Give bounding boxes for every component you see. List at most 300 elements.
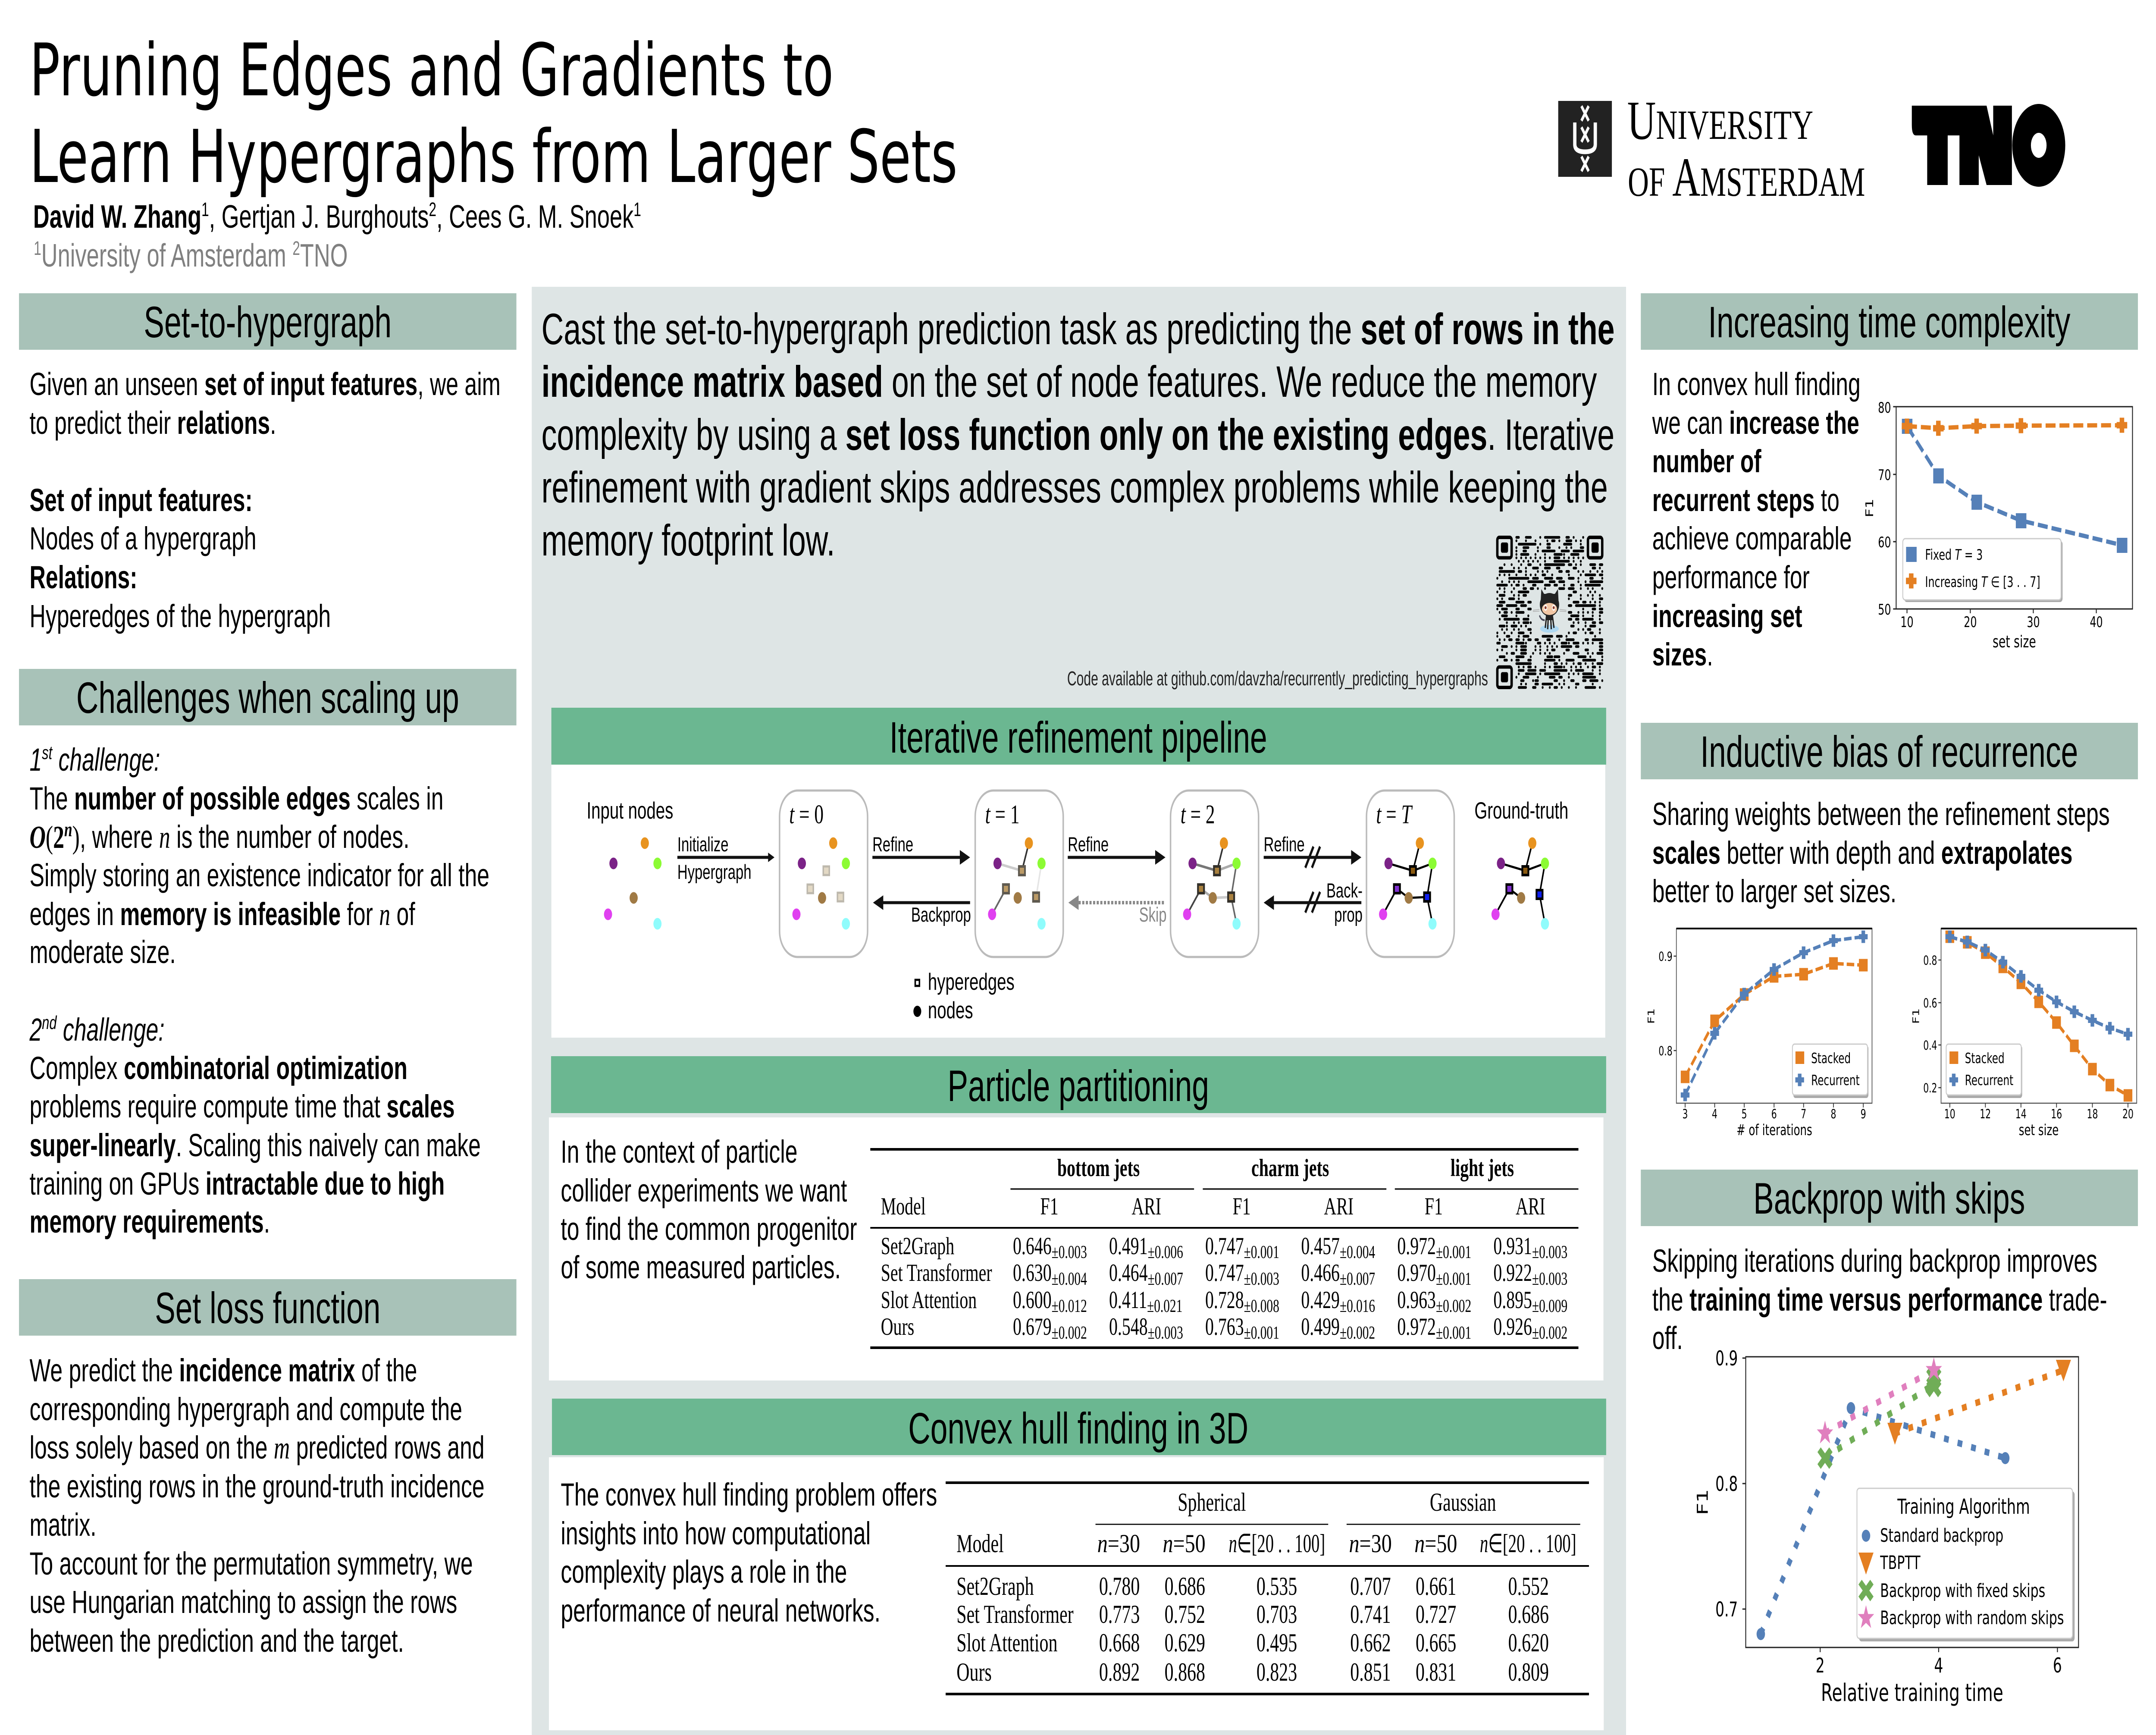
text: increasing time complexity (1652, 366, 1861, 672)
text: set loss function: loss solely based on the m predicted rows and (30, 1430, 485, 1465)
table: convex hull results: 0.707 (1350, 1572, 1391, 1601)
line chart: F1 vs set size, stacked vs recurrent: 12 (1980, 1107, 1991, 1121)
table: convex hull results: 0.629 (1165, 1629, 1205, 1657)
scatter line chart: F1 vs relative training time: Relative training time (1821, 1679, 2003, 1707)
legend: iterations chart: Stacked (1811, 1050, 1851, 1067)
text: challenges: ) (72, 819, 80, 855)
text: set-to-hypergraph intro: Nodes of a hypergraph (30, 521, 257, 556)
table: particle partitioning results: 0.926 (1493, 1313, 1532, 1340)
line chart: F1 vs number of iterations: 5 (1742, 1107, 1747, 1121)
text: central summary: complexity by using a set loss function only on the existing edges. Iterative (542, 410, 1614, 459)
line chart: F1 vs set size, stacked vs recurrent: F1 (1911, 1008, 1921, 1024)
text: challenges: st (42, 743, 53, 763)
line chart: F1 vs number of iterations: 0.9 (1658, 949, 1673, 964)
line chart: F1 vs set size, fixed vs increasing T: F1 (1864, 499, 1876, 518)
table: particle partitioning results: 0.747 (1205, 1259, 1244, 1286)
table: particle partitioning results: 0.600 (1013, 1286, 1052, 1314)
table: convex hull results: 0.809 (1508, 1658, 1549, 1687)
line chart: F1 vs set size, stacked vs recurrent: 18 (2087, 1107, 2098, 1121)
table: particle partitioning results: 0.931 (1493, 1232, 1532, 1260)
table: convex hull results: 0.773 (1099, 1600, 1140, 1629)
table: particle partitioning results: ±0.003 (1148, 1323, 1183, 1343)
affiliations: 2 (292, 238, 300, 259)
arrow: skipped backprop: Skip (1139, 903, 1167, 926)
text: particle partitioning: to find the common progenitor (561, 1211, 857, 1247)
table: convex hull results: Model (956, 1530, 1004, 1558)
text: increasing time complexity: achieve comparable (1652, 521, 1852, 556)
table: convex hull results: 0.661 (1416, 1572, 1456, 1601)
panel: set loss function (19, 1279, 517, 1659)
heading: set loss function: Set loss function (155, 1283, 380, 1333)
arrow: refine t1 to t2: Refine (1068, 833, 1109, 856)
logo: University of Amsterdam: OF AMSTERDAM (1628, 147, 1865, 208)
text: challenges: problems require compute time that scales (30, 1089, 455, 1124)
table: convex hull results: 0.892 (1099, 1658, 1140, 1687)
text: central summary: refinement with gradient skips addresses complex problems while keeping the (542, 462, 1608, 512)
table: particle partitioning results: 0.747 (1205, 1232, 1244, 1260)
text: challenges: Simply storing an existence indicator for all the (30, 857, 489, 893)
table: particle partitioning results: ±0.002 (1340, 1323, 1375, 1343)
line chart: F1 vs number of iterations: 0.8 (1658, 1044, 1673, 1058)
text: set loss function: the existing rows in the ground-truth incidence (30, 1468, 485, 1504)
text: challenges: challenge: (52, 742, 160, 778)
text: challenges: challenge: (56, 1012, 165, 1048)
text: convex hull finding: performance of neural networks. (561, 1593, 881, 1628)
line chart: F1 vs set size, stacked vs recurrent: 0.6 (1923, 996, 1937, 1010)
text: set-to-hypergraph intro (30, 366, 501, 634)
table: particle partitioning results: ±0.009 (1532, 1296, 1567, 1316)
table: particle partitioning results: ARI (1131, 1192, 1161, 1220)
legend: training algorithm: Backprop with fixed skips (1880, 1580, 2045, 1601)
line chart: F1 vs set size, stacked vs recurrent: 16 (2051, 1107, 2062, 1121)
heading: challenges: Challenges when scaling up (76, 673, 459, 722)
table: convex hull results: Ours (956, 1658, 992, 1687)
table: particle partitioning results: ±0.003 (1532, 1269, 1567, 1289)
table: convex hull results: 0.823 (1257, 1658, 1297, 1687)
text: challenges: Complex combinatorial optimization (30, 1050, 407, 1086)
table: particle partitioning results: 0.499 (1301, 1313, 1340, 1340)
table: particle partitioning results: Slot Attention (881, 1286, 977, 1314)
text: set loss function: We predict the incidence matrix of the (30, 1352, 417, 1388)
line chart: F1 vs set size, fixed vs increasing T: set size (1993, 632, 2036, 651)
legend: time complexity chart: Fixed T = 3 (1925, 546, 1983, 563)
line chart: F1 vs number of iterations: 7 (1801, 1107, 1806, 1121)
table: convex hull results: n=30 (1349, 1530, 1392, 1558)
text: challenges: nd (42, 1013, 57, 1033)
panel: increasing time complexity (1641, 293, 2138, 672)
arrow: initialize hypergraph: Hypergraph (677, 860, 752, 883)
table: particle partitioning results: ±0.001 (1436, 1269, 1471, 1289)
line chart: F1 vs set size, stacked vs recurrent: 20 (2122, 1107, 2134, 1121)
heading: backprop with skips: Backprop with skips (1753, 1173, 2025, 1223)
legend: hyperedges and nodes: nodes (928, 997, 973, 1024)
text: set loss function (30, 1352, 485, 1659)
text: set loss function: corresponding hypergraph and compute the (30, 1391, 462, 1427)
arrow: refine with gradient cut (1264, 833, 1361, 868)
legend: iterations chart (1792, 1044, 1868, 1098)
authors: 2 (429, 199, 436, 220)
table: particle partitioning results: 0.970 (1397, 1259, 1436, 1286)
panel: inductive bias of recurrence (1641, 723, 2138, 1139)
heading: set loss function (19, 1279, 517, 1336)
heading: inductive bias of recurrence (1641, 723, 2138, 779)
legend: training algorithm: Standard backprop (1880, 1525, 2003, 1546)
table: particle partitioning results: 0.728 (1205, 1286, 1244, 1314)
table: convex hull results: 0.831 (1416, 1658, 1456, 1687)
line chart: F1 vs number of iterations: # of iterations (1736, 1122, 1812, 1139)
arrow: backprop t1 to t0 (873, 895, 971, 926)
authors: 1 (201, 199, 209, 220)
line chart: F1 vs number of iterations (1646, 929, 1872, 1139)
legend: time complexity chart (1903, 539, 2062, 602)
table: convex hull results: 0.668 (1099, 1629, 1140, 1657)
text: convex hull finding: insights into how computational (561, 1515, 871, 1551)
table: particle partitioning results: 0.972 (1397, 1313, 1436, 1340)
diagram: state t=T: t = T (1376, 799, 1413, 829)
scatter line chart: F1 vs relative training time: 4 (1934, 1653, 1943, 1678)
line chart: F1 vs set size, fixed vs increasing T: 20 (1964, 614, 1977, 631)
heading: inductive bias of recurrence: Inductive bias of recurrence (1700, 727, 2078, 776)
text: challenges: 2 (30, 1012, 42, 1048)
scatter line chart: F1 vs relative training time: 2 (1816, 1653, 1825, 1678)
text: increasing time complexity: performance for (1652, 559, 1810, 595)
text: challenges: O(2 (30, 819, 64, 855)
scatter line chart: F1 vs relative training time: F1 (1694, 1489, 1711, 1515)
text: backprop with skips (1652, 1243, 2107, 1356)
table: particle partitioning results: ±0.003 (1244, 1269, 1279, 1289)
table: convex hull results: Slot Attention (956, 1629, 1058, 1657)
table: particle partitioning results: ARI (1324, 1192, 1354, 1220)
panel: challenges when scaling up (19, 669, 517, 1239)
text: backprop with skips: the training time versus performance trade- (1652, 1282, 2107, 1318)
logo: University of Amsterdam: UNIVERSITY (1627, 90, 1813, 151)
text: challenges: 1 (30, 742, 42, 778)
arrow: backprop with gradient cut: Back- (1326, 879, 1363, 902)
authors: David W. Zhang (33, 198, 201, 235)
text: increasing time complexity: we can increase the (1652, 405, 1859, 441)
table: convex hull results: 0.703 (1257, 1600, 1297, 1629)
table: convex hull results: Gaussian (1430, 1488, 1496, 1517)
text: particle partitioning (561, 1134, 857, 1285)
arrow: refine t0 to t1: Refine (872, 833, 913, 856)
table: convex hull results: 0.686 (1165, 1572, 1205, 1601)
line chart: F1 vs set size, fixed vs increasing T: 10 (1900, 614, 1914, 631)
table: particle partitioning results: light jets (1451, 1154, 1514, 1182)
table: convex hull results: 0.851 (1350, 1658, 1391, 1687)
heading: iterative refinement pipeline (552, 708, 1606, 765)
text: challenges: The number of possible edges scales in (30, 781, 443, 816)
affiliations: 1 (34, 238, 41, 259)
table: convex hull results: 0.741 (1350, 1600, 1391, 1629)
affiliations: University of Amsterdam (41, 237, 292, 273)
line chart: F1 vs set size, stacked vs recurrent: set size (2019, 1122, 2059, 1139)
text: set-to-hypergraph intro: Set of input features: (30, 482, 253, 518)
table: convex hull results: n=30 (1097, 1530, 1140, 1558)
text: backprop with skips: Skipping iterations during backprop improves (1652, 1243, 2097, 1279)
table: particle partitioning results: ±0.016 (1340, 1296, 1375, 1316)
text: particle partitioning: of some measured particles. (561, 1249, 841, 1285)
scatter line chart: F1 vs relative training time: 0.8 (1715, 1472, 1738, 1496)
legend: set size chart: Stacked (1965, 1050, 2005, 1067)
table: convex hull results: n=50 (1414, 1530, 1457, 1558)
poster title (30, 28, 958, 200)
text: challenges: n (64, 818, 72, 841)
table: convex hull results: 0.495 (1257, 1629, 1297, 1657)
table: particle partitioning results: F1 (1040, 1192, 1059, 1220)
panel: particle partitioning (549, 1056, 1606, 1380)
table: particle partitioning results: 0.429 (1301, 1286, 1340, 1314)
text: increasing time complexity: number of (1652, 443, 1761, 479)
diagram: state t=0 (780, 791, 868, 957)
logo: University of Amsterdam (1558, 90, 1865, 208)
arrow: refine t0 to t1 (872, 833, 970, 865)
text: inductive bias: Sharing weights between the refinement steps (1652, 796, 2110, 832)
legend: training algorithm: Training Algorithm (1897, 1495, 2030, 1519)
legend: set size chart (1946, 1044, 2022, 1098)
text: inductive bias (1652, 796, 2110, 909)
table: particle partitioning results: 0.466 (1301, 1259, 1340, 1286)
table: particle partitioning results: 0.630 (1013, 1259, 1052, 1286)
table: convex hull results (946, 1483, 1589, 1694)
arrow: backprop with gradient cut (1264, 879, 1363, 926)
text: challenges: memory requirements. (30, 1204, 270, 1239)
scatter line chart: F1 vs relative training time: 0.7 (1715, 1597, 1738, 1622)
text: convex hull finding (561, 1477, 937, 1628)
poster title: Pruning Edges and Gradients to (30, 28, 834, 113)
legend: training algorithm: TBPTT (1880, 1552, 1921, 1573)
logo: TNO (1912, 104, 2065, 187)
text: set loss function: between the prediction and the target. (30, 1623, 404, 1659)
line chart: F1 vs set size, stacked vs recurrent: 0.4 (1923, 1038, 1937, 1053)
line chart: F1 vs set size, fixed vs increasing T: 80 (1878, 399, 1891, 416)
diagram: input nodes: Input nodes (586, 797, 673, 824)
text: set loss function: matrix. (30, 1507, 97, 1543)
legend: training algorithm: Backprop with random skips (1880, 1607, 2064, 1628)
table: particle partitioning results: 0.411 (1109, 1286, 1147, 1314)
heading: increasing time complexity (1641, 293, 2138, 350)
panel: iterative refinement pipeline (552, 708, 1606, 1038)
text: challenges: edges in memory is infeasible for n of (30, 896, 415, 932)
text: code availability: Code available at github.com/davzha/recurrently_predicting_hypergraphs (1067, 668, 1488, 690)
table: particle partitioning results: ±0.002 (1052, 1323, 1087, 1343)
arrow: backprop with gradient cut: prop (1334, 903, 1363, 926)
arrow: skipped backprop (1069, 895, 1167, 926)
table: particle partitioning results: 0.491 (1109, 1232, 1148, 1260)
heading: iterative refinement pipeline: Iterative refinement pipeline (890, 712, 1267, 762)
table: particle partitioning results: ±0.002 (1436, 1296, 1471, 1316)
table: particle partitioning results: 0.763 (1205, 1313, 1244, 1340)
table: particle partitioning results: ±0.012 (1052, 1296, 1087, 1316)
table: particle partitioning results: ±0.002 (1532, 1323, 1567, 1343)
text: set-to-hypergraph intro: Hyperedges of the hypergraph (30, 598, 331, 634)
text: set loss function: To account for the permutation symmetry, we (30, 1546, 473, 1581)
table: particle partitioning results: ±0.004 (1340, 1242, 1375, 1262)
arrow: initialize hypergraph: Initialize (677, 833, 729, 856)
text: set-to-hypergraph intro: to predict their relations. (30, 405, 276, 441)
table: particle partitioning results: Model (881, 1192, 926, 1220)
text: challenges: moderate size. (30, 934, 176, 970)
table: particle partitioning results: F1 (1233, 1192, 1251, 1220)
scatter line chart: F1 vs relative training time: 0.9 (1715, 1346, 1738, 1371)
line chart: F1 vs set size, fixed vs increasing T (1864, 399, 2132, 651)
line chart: F1 vs set size, stacked vs recurrent: 0.8 (1923, 953, 1937, 968)
text: backprop with skips: off. (1652, 1320, 1683, 1356)
scatter line chart: F1 vs relative training time: 6 (2053, 1653, 2062, 1678)
table: particle partitioning results: 0.895 (1493, 1286, 1532, 1314)
heading: convex hull finding (552, 1399, 1606, 1455)
text: particle partitioning: In the context of particle (561, 1134, 797, 1170)
table: convex hull results: 0.620 (1508, 1629, 1549, 1657)
text: challenges: , where n is the number of nodes. (80, 819, 410, 855)
table: particle partitioning results: ±0.004 (1052, 1269, 1087, 1289)
arrow: refine t1 to t2 (1068, 833, 1166, 865)
authors: , Gertjan J. Burghouts (209, 198, 429, 235)
table: particle partitioning results: ±0.007 (1148, 1269, 1183, 1289)
table: convex hull results: 0.686 (1508, 1600, 1549, 1629)
heading: increasing time complexity: Increasing time complexity (1708, 297, 2070, 347)
text: set-to-hypergraph intro: Given an unseen set of input features, we aim (30, 366, 501, 402)
line chart: F1 vs set size, fixed vs increasing T: 40 (2090, 614, 2103, 631)
text: challenges: training on GPUs intractable due to high (30, 1166, 445, 1202)
table: particle partitioning results: ±0.003 (1052, 1242, 1087, 1262)
heading: backprop with skips (1641, 1170, 2138, 1226)
authors: , Cees G. M. Snoek (436, 198, 634, 235)
table: particle partitioning results: charm jets (1251, 1154, 1329, 1182)
line chart: F1 vs number of iterations: 6 (1771, 1107, 1777, 1121)
diagram: input nodes (586, 797, 673, 930)
table: convex hull results: 0.535 (1257, 1572, 1297, 1601)
arrow: refine with gradient cut: Refine (1264, 833, 1305, 856)
text: increasing time complexity: increasing set (1652, 598, 1802, 634)
heading: challenges (19, 669, 517, 725)
table: particle partitioning results: 0.646 (1013, 1232, 1052, 1260)
line chart: F1 vs set size, stacked vs recurrent (1911, 929, 2137, 1139)
legend: set size chart: Recurrent (1965, 1072, 2013, 1089)
line chart: F1 vs set size, fixed vs increasing T: 30 (2027, 614, 2040, 631)
heading: set-to-hypergraph: Set-to-hypergraph (144, 297, 392, 347)
table: convex hull results: Set Transformer (956, 1600, 1074, 1629)
table: convex hull results: 0.868 (1165, 1658, 1205, 1687)
table: convex hull results: Spherical (1178, 1488, 1246, 1517)
panel: set-to-hypergraph (19, 293, 517, 634)
table: particle partitioning results: 0.922 (1493, 1259, 1532, 1286)
diagram: state t=2: t = 2 (1181, 799, 1215, 829)
table: particle partitioning results: Set2Graph (881, 1232, 954, 1260)
table: particle partitioning results: 0.548 (1109, 1313, 1148, 1340)
table: particle partitioning results: F1 (1425, 1192, 1443, 1220)
line chart: F1 vs number of iterations: F1 (1646, 1008, 1657, 1024)
panel: convex hull finding in 3D (549, 1399, 1606, 1730)
diagram: state t=1 (975, 791, 1063, 957)
text: increasing time complexity: recurrent steps to (1652, 482, 1839, 518)
table: particle partitioning results: 0.464 (1109, 1259, 1148, 1286)
line chart: F1 vs set size, stacked vs recurrent: 10 (1944, 1107, 1955, 1121)
text: set loss function: use Hungarian matching to assign the rows (30, 1584, 457, 1620)
arrow: backprop t1 to t0: Backprop (911, 903, 971, 926)
table: particle partitioning results: ±0.001 (1436, 1323, 1471, 1343)
legend: time complexity chart: Increasing T ∈ [3 . . 7] (1925, 574, 2040, 590)
line chart: F1 vs number of iterations: 3 (1683, 1107, 1688, 1121)
table: convex hull results: 0.752 (1165, 1600, 1205, 1629)
table: particle partitioning results: bottom jets (1057, 1154, 1140, 1182)
table: particle partitioning results: ±0.007 (1340, 1269, 1375, 1289)
table: particle partitioning results: ±0.001 (1244, 1242, 1279, 1262)
arrow: initialize hypergraph (677, 833, 774, 883)
panel: centre column background (532, 287, 1626, 1735)
icon: QR code with octocat (1497, 537, 1602, 687)
table: particle partitioning results: Ours (881, 1313, 914, 1340)
table: particle partitioning results: 0.679 (1013, 1313, 1052, 1340)
table: convex hull results: 0.727 (1416, 1600, 1456, 1629)
diagram: ground truth (1474, 797, 1568, 930)
legend: iterations chart: Recurrent (1811, 1072, 1860, 1089)
diagram: state t=T (1366, 791, 1454, 957)
line chart: F1 vs set size, fixed vs increasing T: 50 (1878, 601, 1891, 618)
table: particle partitioning results: Set Transformer (881, 1259, 992, 1286)
text: inductive bias: better to larger set sizes. (1652, 873, 1896, 909)
table: particle partitioning results: ±0.003 (1532, 1242, 1567, 1262)
text: convex hull finding: complexity plays a role in the (561, 1554, 847, 1590)
table: particle partitioning results: 0.972 (1397, 1232, 1436, 1260)
table: particle partitioning results: 0.457 (1301, 1232, 1340, 1260)
line chart: F1 vs set size, fixed vs increasing T: 70 (1878, 467, 1891, 483)
line chart: F1 vs set size, stacked vs recurrent: 0.2 (1923, 1081, 1937, 1095)
text: convex hull finding: The convex hull finding problem offers (561, 1477, 937, 1512)
diagram: state t=1: t = 1 (985, 799, 1020, 829)
legend: hyperedges and nodes: hyperedges (928, 969, 1015, 995)
table: particle partitioning results: ±0.008 (1244, 1296, 1279, 1316)
line chart: F1 vs set size, stacked vs recurrent: 14 (2015, 1107, 2027, 1121)
table: particle partitioning results: ±0.001 (1244, 1323, 1279, 1343)
text: inductive bias: scales better with depth and extrapolates (1652, 835, 2073, 871)
table: particle partitioning results (870, 1149, 1579, 1348)
affiliations: TNO (300, 237, 348, 273)
table: particle partitioning results: ±0.006 (1148, 1242, 1183, 1262)
heading: particle partitioning: Particle partitioning (947, 1061, 1209, 1111)
table: convex hull results: 0.662 (1350, 1629, 1391, 1657)
diagram: state t=2 (1171, 791, 1259, 957)
table: convex hull results: n∈[20 . . 100] (1229, 1530, 1325, 1558)
line chart: F1 vs number of iterations: 4 (1712, 1107, 1717, 1121)
panel: backprop with skips (1641, 1170, 2138, 1707)
poster title: Learn Hypergraphs from Larger Sets (30, 115, 958, 200)
text: challenges: super-linearly. Scaling this naively can make (30, 1127, 481, 1163)
text: set-to-hypergraph intro: Relations: (30, 559, 138, 595)
text: central summary: memory footprint low. (542, 515, 835, 565)
heading: particle partitioning (551, 1056, 1606, 1113)
text: increasing time complexity: In convex hull finding (1652, 366, 1861, 402)
authors: 1 (633, 199, 641, 220)
table: convex hull results: 0.780 (1099, 1572, 1140, 1601)
legend: hyperedges and nodes (913, 969, 1015, 1024)
text: increasing time complexity: sizes. (1652, 637, 1713, 672)
heading: set-to-hypergraph (19, 293, 517, 350)
text: central summary (542, 304, 1614, 565)
legend: training algorithm (1857, 1488, 2075, 1641)
text: challenges (29, 742, 489, 1239)
table: particle partitioning results: ±0.021 (1147, 1296, 1182, 1316)
table: particle partitioning results: 0.963 (1397, 1286, 1436, 1314)
table: convex hull results: 0.665 (1416, 1629, 1456, 1657)
line chart: F1 vs number of iterations: 8 (1831, 1107, 1836, 1121)
table: particle partitioning results: ARI (1516, 1192, 1545, 1220)
diagram: state t=0: t = 0 (789, 799, 824, 829)
text: particle partitioning: collider experiments we want (561, 1173, 847, 1208)
line chart: F1 vs set size, fixed vs increasing T: 60 (1878, 534, 1891, 551)
table: particle partitioning results: ±0.001 (1436, 1242, 1471, 1262)
table: convex hull results: Set2Graph (956, 1572, 1034, 1601)
line chart: F1 vs number of iterations: 9 (1861, 1107, 1866, 1121)
